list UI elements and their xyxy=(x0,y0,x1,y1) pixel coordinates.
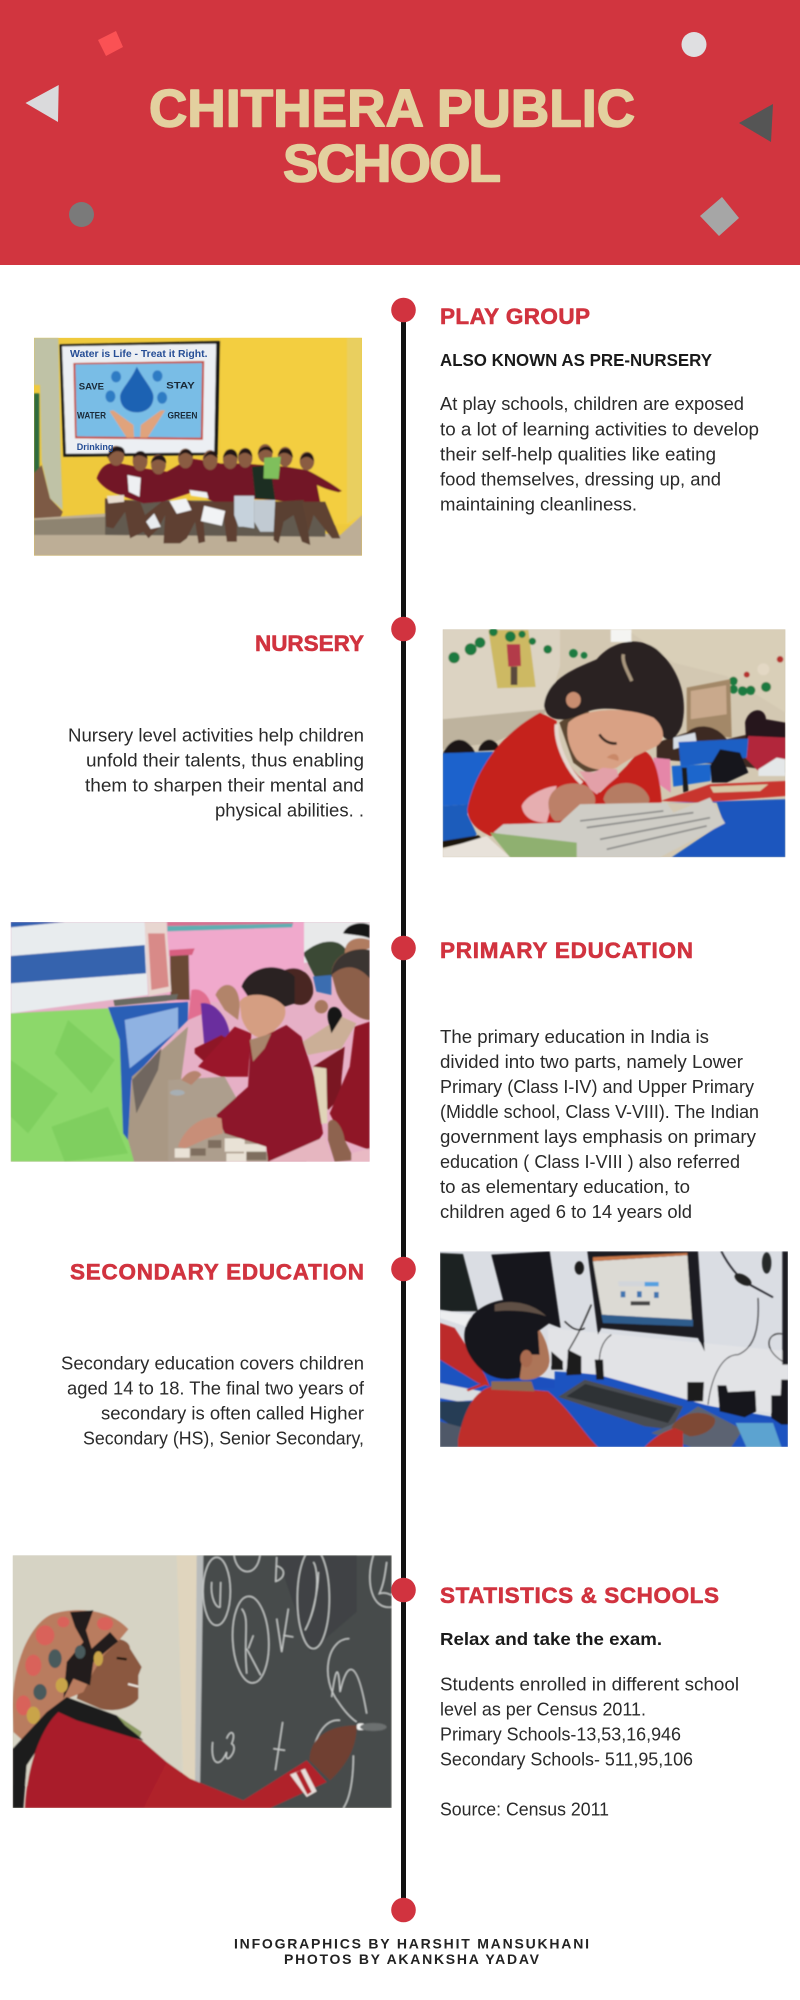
subheading: also known as pre-nursery: ALSO KNOWN AS PRE-NURSERY xyxy=(440,350,712,370)
icon: grey diamond confetti xyxy=(700,197,739,236)
photo: students in front of yellow wall with water poster: Drinking xyxy=(77,442,114,452)
title: SCHOOL xyxy=(283,134,501,194)
text: statistics details: Primary Schools-13,53,16,946 xyxy=(440,1725,681,1745)
text: secondary education description: Secondary (HS), Senior Secondary, xyxy=(83,1429,364,1449)
text: statistics details: Secondary Schools- 511,95,106 xyxy=(440,1750,693,1770)
text: primary education description: education ( Class I-VIII ) also referred xyxy=(440,1152,740,1172)
heading: play group: PLAY GROUP xyxy=(440,304,590,329)
text: play group description: to a lot of learning activities to develop xyxy=(440,419,759,439)
footer credits: PHOTOS BY AKANKSHA YADAV xyxy=(284,1951,540,1967)
text: primary education description xyxy=(440,1027,759,1222)
timeline line xyxy=(401,310,406,1910)
text: nursery description: Nursery level activities help children xyxy=(68,726,364,746)
heading: primary education: PRIMARY EDUCATION xyxy=(440,938,693,963)
text: nursery description: unfold their talents, thus enabling xyxy=(86,750,364,770)
text: primary education description: divided into two parts, namely Lower xyxy=(440,1052,743,1072)
heading: statistics and schools: STATISTICS & SCHOOLS xyxy=(440,1583,719,1608)
panel: secondary education xyxy=(61,1251,788,1449)
photo: boy in red sweater at computer xyxy=(440,1251,788,1447)
footer credits xyxy=(234,1936,589,1967)
panel: play group xyxy=(34,298,759,556)
text: nursery description xyxy=(68,726,364,820)
text: statistics details xyxy=(440,1675,739,1820)
footer credits: INFOGRAPHICS BY HARSHIT MANSUKHANI xyxy=(234,1936,589,1952)
photo: students in front of yellow wall with water poster: SAVE xyxy=(79,381,104,391)
text: statistics details: Students enrolled in different school xyxy=(440,1675,739,1695)
text: primary education description: (Middle school, Class V-VIII). The Indian xyxy=(440,1102,759,1122)
text: secondary education description: Secondary education covers children xyxy=(61,1354,364,1374)
text: primary education description: The primary education in India is xyxy=(440,1027,709,1047)
students: sweaters xyxy=(97,458,342,508)
title: CHITHERA PUBLIC xyxy=(149,80,635,138)
text: secondary education description: secondary is often called Higher xyxy=(101,1404,364,1424)
photo: students in front of yellow wall with water poster: WATER xyxy=(77,411,106,421)
bench behind legs xyxy=(105,500,325,537)
text: play group description: their self-help qualities like eating xyxy=(440,444,716,464)
panel: primary education xyxy=(11,922,759,1222)
timeline dot xyxy=(391,617,416,641)
text: play group description: food themselves, dressing up, and xyxy=(440,469,721,489)
icon: pink square confetti xyxy=(98,31,123,56)
text: statistics details: Source: Census 2011 xyxy=(440,1800,609,1820)
photo: students in front of yellow wall with water poster: Water is Life - Treat it Right. xyxy=(70,349,208,360)
students: papers xyxy=(127,475,141,497)
text: primary education description: children aged 6 to 14 years old xyxy=(440,1202,692,1222)
timeline dot xyxy=(391,1578,416,1602)
timeline dot xyxy=(391,298,416,322)
text: primary education description: Primary (Class I-IV) and Upper Primary xyxy=(440,1077,754,1097)
subheading: relax and take the exam: Relax and take the exam. xyxy=(440,1629,662,1649)
text: statistics details: level as per Census 2011. xyxy=(440,1700,646,1720)
photo: students in front of yellow wall with water poster: GREEN xyxy=(167,411,198,421)
photo: girls washing hands at taps xyxy=(10,922,370,1162)
timeline dot xyxy=(391,1257,416,1281)
photo: students in front of yellow wall with water poster: STAY xyxy=(166,381,196,391)
icon: dark triangle confetti xyxy=(739,104,773,142)
text: nursery description: physical abilities. . xyxy=(215,800,364,820)
icon: light triangle confetti xyxy=(26,85,59,122)
text: play group description: maintaining cleanliness. xyxy=(440,494,637,514)
icon: light circle confetti xyxy=(682,32,706,57)
heading: secondary education: SECONDARY EDUCATION xyxy=(70,1260,364,1284)
text: play group description xyxy=(440,394,759,514)
title xyxy=(149,80,635,194)
panel: nursery xyxy=(68,617,785,857)
photo: girl in red sweater writing at blue desk xyxy=(442,629,786,858)
text: secondary education description xyxy=(61,1354,365,1449)
text: primary education description: government lays emphasis on primary xyxy=(440,1127,756,1147)
photo: student writing on chalkboard xyxy=(12,1555,392,1808)
timeline end dot xyxy=(391,1898,416,1922)
photo: students in front of yellow wall with water poster xyxy=(34,338,362,556)
text: secondary education description: aged 14 to 18. The final two years of xyxy=(67,1379,365,1399)
heading: nursery: NURSERY xyxy=(255,631,364,656)
text: primary education description: to as elementary education, to xyxy=(440,1177,690,1197)
header banner xyxy=(0,0,800,265)
students: trousers xyxy=(105,498,237,543)
timeline dot xyxy=(391,936,416,960)
text: play group description: At play schools, children are exposed xyxy=(440,394,744,414)
panel: statistics and schools xyxy=(13,1549,739,1820)
text: nursery description: them to sharpen their mental and xyxy=(85,776,364,796)
students: heads xyxy=(108,444,314,474)
icon: grey circle confetti xyxy=(69,202,94,227)
